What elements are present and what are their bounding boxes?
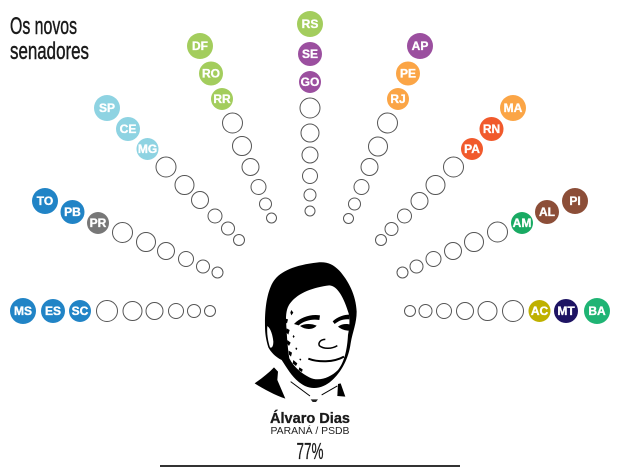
eye left: [300, 324, 317, 329]
ray: west: SC: [72, 304, 89, 318]
ray: northeast: [376, 95, 526, 246]
ray: east: MT: [557, 304, 575, 318]
ray: west-northwest: TO: [37, 194, 53, 208]
title: Os novos: [10, 13, 77, 40]
ray: west: MS: [14, 304, 32, 318]
ray: north-northeast: [344, 33, 433, 224]
ray: east-northeast: AM: [513, 216, 531, 230]
ear: [267, 326, 273, 348]
ray: northwest: CE: [120, 122, 136, 136]
ray: northeast: MA: [504, 101, 523, 115]
ray: north: SE: [302, 47, 318, 61]
ray: north-northwest: DF: [192, 39, 208, 53]
ray: west-northwest: [32, 188, 223, 278]
ray: north: GO: [301, 75, 319, 89]
mouth: [308, 357, 344, 361]
title: senadores: [10, 38, 89, 65]
ray: north: RS: [302, 17, 318, 31]
ray: northwest: MG: [138, 142, 157, 156]
ray: east: [404, 298, 610, 324]
collar and tie: [291, 382, 337, 396]
ray: west: [10, 298, 216, 324]
jacket right: [337, 383, 345, 397]
ray: northwest: SP: [99, 101, 115, 115]
portrait: Álvaro Dias: [255, 262, 357, 402]
name: Álvaro Dias: [270, 410, 350, 427]
baseline rule: [160, 465, 460, 467]
ray: east: BA: [588, 304, 606, 318]
title: [10, 13, 89, 65]
ray: east-northeast: PI: [569, 194, 581, 208]
ray: east: AC: [531, 304, 548, 318]
ray: north-northwest: RR: [213, 92, 231, 106]
state and party: PARANÁ / PSDB: [270, 424, 350, 437]
nose: [319, 339, 337, 348]
ray: east-northeast: [397, 188, 588, 278]
ray: west-northwest: PR: [90, 216, 107, 230]
ray: north-northeast: PE: [400, 66, 416, 80]
eye right: [338, 324, 350, 331]
ray: north-northeast: AP: [412, 39, 428, 53]
ray: northeast: RN: [483, 122, 500, 136]
ray: north-northwest: RO: [202, 66, 220, 80]
ray: west: ES: [45, 304, 61, 318]
ray: west-northwest: PB: [64, 205, 81, 219]
eyebrow right: [333, 315, 349, 324]
ray: north-northwest: [187, 33, 276, 223]
ray: north: [297, 11, 323, 216]
ray: east-northeast: AL: [539, 205, 555, 219]
jacket left: [255, 367, 285, 399]
ray: northwest: [94, 95, 244, 246]
face highlight: [286, 285, 349, 379]
vote percentage: 77%: [296, 438, 324, 464]
ray: north-northeast: RJ: [390, 92, 406, 106]
cheek speckle: [285, 310, 303, 372]
eyebrow left: [294, 315, 320, 325]
ray: northeast: PA: [464, 142, 480, 156]
